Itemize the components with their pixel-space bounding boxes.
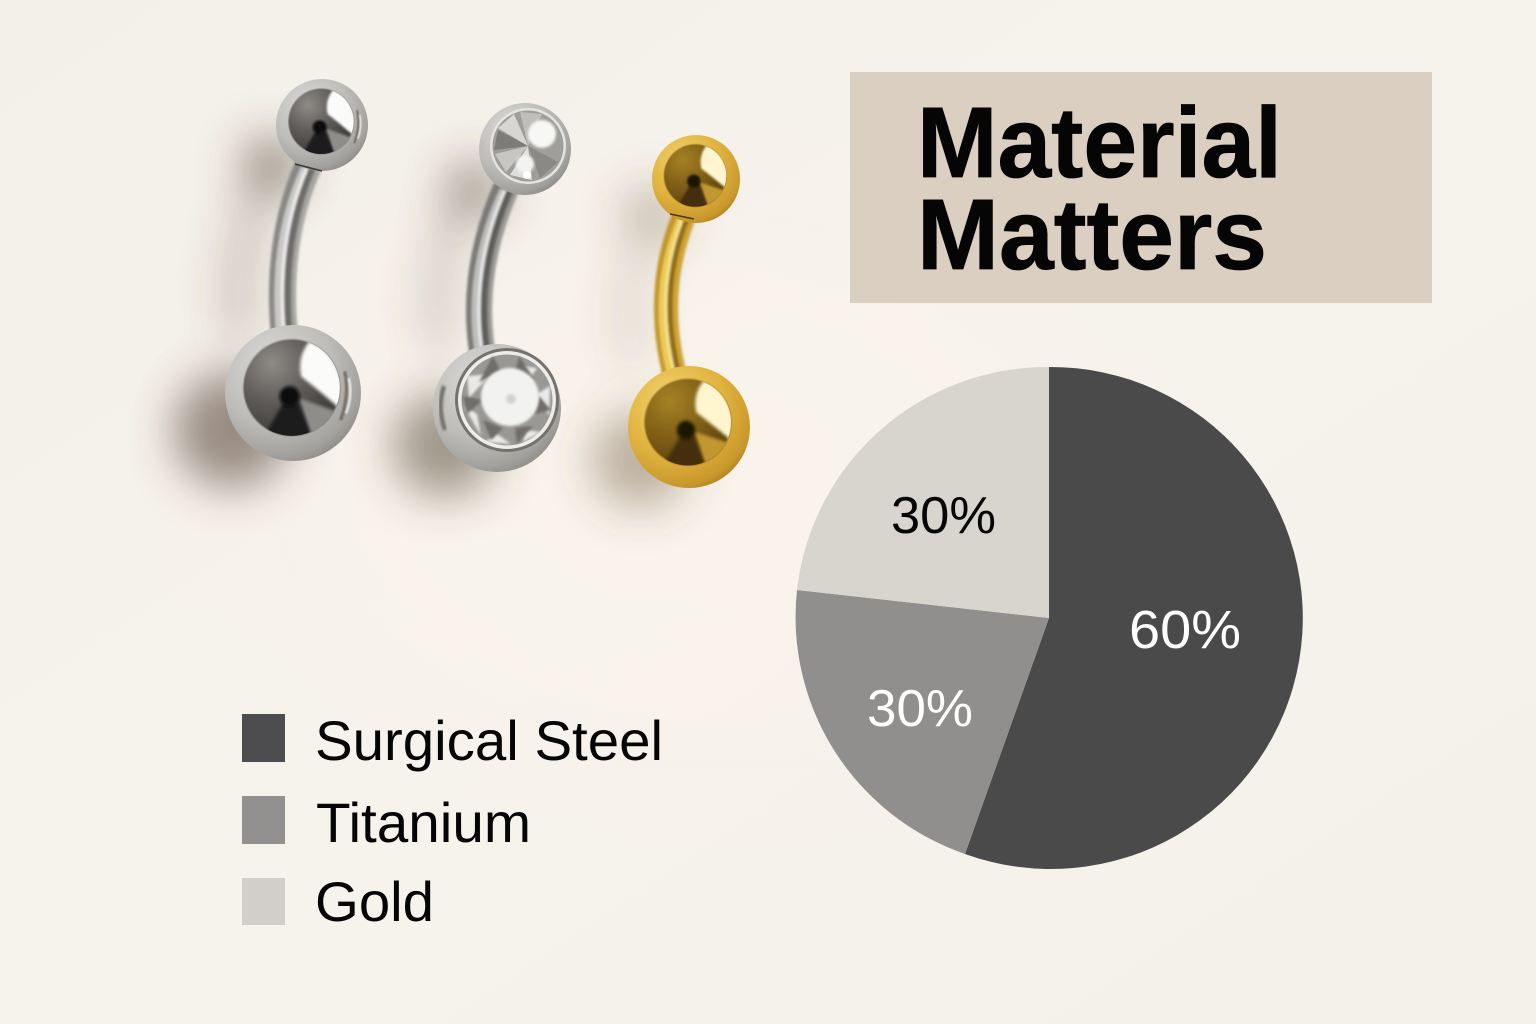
- top ball with gem: [479, 103, 571, 195]
- bar: titanium: [475, 188, 516, 352]
- shadows behind jewelry: [174, 135, 688, 508]
- legend: [242, 709, 663, 933]
- gold collar line: [670, 214, 694, 219]
- legend item: surgical steel: Surgical Steel: [315, 709, 663, 772]
- legend item: titanium: Titanium: [316, 791, 531, 854]
- legend item: gold: [242, 870, 434, 933]
- legend item: gold: Gold: [315, 870, 434, 933]
- top ball: gold: [652, 135, 740, 223]
- bar: steel: [278, 166, 318, 332]
- bottom ball: gold: [628, 366, 750, 488]
- label: steel 60%: 60%: [1129, 600, 1241, 660]
- piercing: gold barbell: [628, 135, 750, 488]
- title line 1: Material: [917, 87, 1282, 199]
- bottom ball: steel: [225, 325, 361, 461]
- collar line: [295, 164, 322, 171]
- bottom ball with gem: [433, 344, 561, 472]
- piercing: crystal titanium barbell: [433, 103, 571, 472]
- slice: titanium: [796, 590, 1049, 854]
- title line 2: Matters: [917, 179, 1267, 291]
- top ball: steel: [276, 79, 368, 171]
- label: gold 30%: 30%: [891, 487, 996, 545]
- pie chart: [796, 367, 1303, 869]
- slice: gold: [797, 367, 1049, 618]
- title panel: [850, 72, 1432, 303]
- slice: surgical steel: [965, 367, 1303, 869]
- bar: gold: [662, 216, 693, 372]
- label: titanium 30%: 30%: [867, 680, 973, 738]
- piercing: surgical steel barbell: [225, 79, 368, 461]
